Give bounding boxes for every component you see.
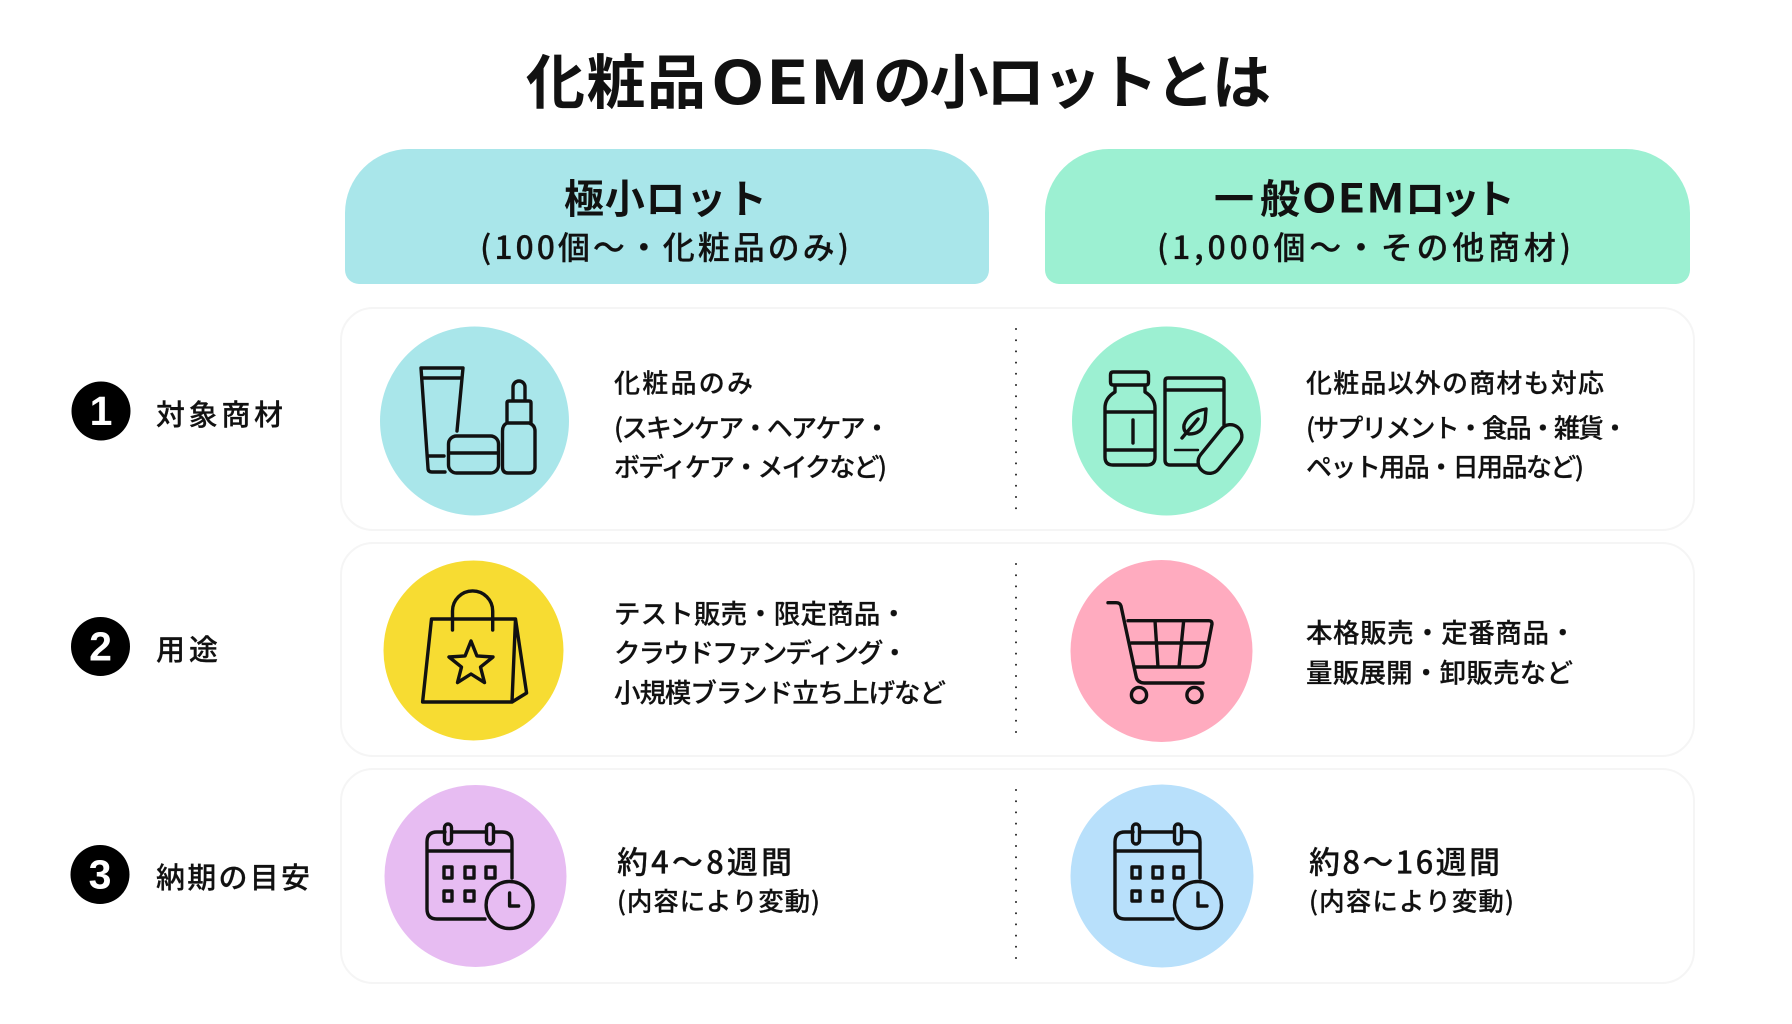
- header title: 一般OEMロット: OEM: [1302, 167, 1406, 225]
- text: 化粧品以外の商材も対応: (サプリメント・食品・雑貨・: [1306, 408, 1628, 446]
- header title: 一般OEMロット: ロット: [1405, 167, 1515, 225]
- row label 1: 対象商材: 対象商材: [156, 392, 283, 434]
- icon circle: cosmetics: [380, 326, 569, 516]
- tube: [421, 368, 463, 472]
- row label 3: 納期の目安: [70, 845, 310, 904]
- row label 2: 用途: 2: [89, 624, 112, 670]
- title: OEM: [711, 35, 870, 121]
- header title: 一般OEMロット: [1214, 167, 1515, 225]
- text: テスト販売: [614, 592, 946, 710]
- text: 化粧品のみ: [614, 364, 890, 484]
- text: テスト販売: クラウドファンディング・: [614, 632, 908, 670]
- title: の小ロットとは: [873, 36, 1271, 120]
- text: 化粧品以外の商材も対応: 化粧品以外の商材も対応: [1306, 364, 1604, 400]
- title: [526, 35, 1271, 121]
- row label 3: 納期の目安: 3: [89, 852, 111, 898]
- icon circle: supplements: [1072, 326, 1261, 516]
- text: 約4〜8週間: [617, 838, 820, 918]
- text: テスト販売: 小規模ブランド立ち上げなど: [614, 672, 946, 710]
- panel: row 3 納期の目安: [341, 769, 1694, 983]
- text: 約8〜16週間: 約8〜16週間: [1309, 838, 1500, 882]
- text: 本格販売: 本格販売・定番商品・: [1306, 612, 1576, 650]
- text: 化粧品以外の商材も対応: [1306, 364, 1628, 484]
- column header: 極小ロット: [345, 149, 989, 284]
- row label 2: 用途: [71, 617, 218, 676]
- icon circle: shopping cart: [1070, 560, 1252, 742]
- text: 約4〜8週間: 約4〜8週間: [617, 838, 792, 882]
- title: 化粧品: [526, 36, 706, 120]
- header subtitle: 1,000個〜: (1,000個〜・その他商材): [1157, 223, 1571, 269]
- panel: row 2 用途: [341, 543, 1694, 756]
- capsule: [1193, 420, 1247, 478]
- text: 化粧品以外の商材も対応: ペット用品・日用品など): [1306, 448, 1584, 484]
- text: 約4〜8週間: (内容により変動): [617, 882, 820, 918]
- row label 1: 対象商材: [72, 382, 283, 440]
- panel: row 1 対象商材: [341, 308, 1694, 530]
- jar: [448, 436, 498, 473]
- icon circle: shopping bag: [384, 560, 564, 740]
- jar with leaf: [1165, 378, 1224, 465]
- header title: 一般OEMロット: 一般: [1214, 167, 1300, 225]
- header title: 極小ロット: 極小ロット: [564, 167, 767, 225]
- text: 約8〜16週間: [1309, 838, 1514, 918]
- row label 2: 用途: 用途: [156, 627, 218, 669]
- text: テスト販売: テスト販売・限定商品・: [614, 592, 907, 632]
- icon circle: calendar left: [384, 785, 566, 967]
- row label 3: 納期の目安: 納期の目安: [156, 855, 310, 897]
- dropper bottle: [502, 381, 535, 473]
- row label 1: 対象商材: 1: [90, 388, 112, 434]
- star: [449, 641, 493, 683]
- text: 本格販売: [1306, 612, 1576, 690]
- icon circle: calendar right: [1070, 784, 1254, 968]
- text: 化粧品のみ: ボディケア・メイクなど): [614, 448, 887, 484]
- bottle: [1105, 372, 1155, 465]
- text: 化粧品のみ: 化粧品のみ: [614, 364, 753, 400]
- text: 本格販売: 量販展開・卸販売など: [1306, 652, 1573, 690]
- header subtitle: 100個〜: (100個〜・化粧品のみ): [480, 223, 849, 269]
- text: 約8〜16週間: (内容により変動): [1309, 882, 1514, 918]
- text: 化粧品のみ: (スキンケア・ヘアケア・: [614, 408, 890, 446]
- column header: 一般OEMロット: [1045, 149, 1690, 284]
